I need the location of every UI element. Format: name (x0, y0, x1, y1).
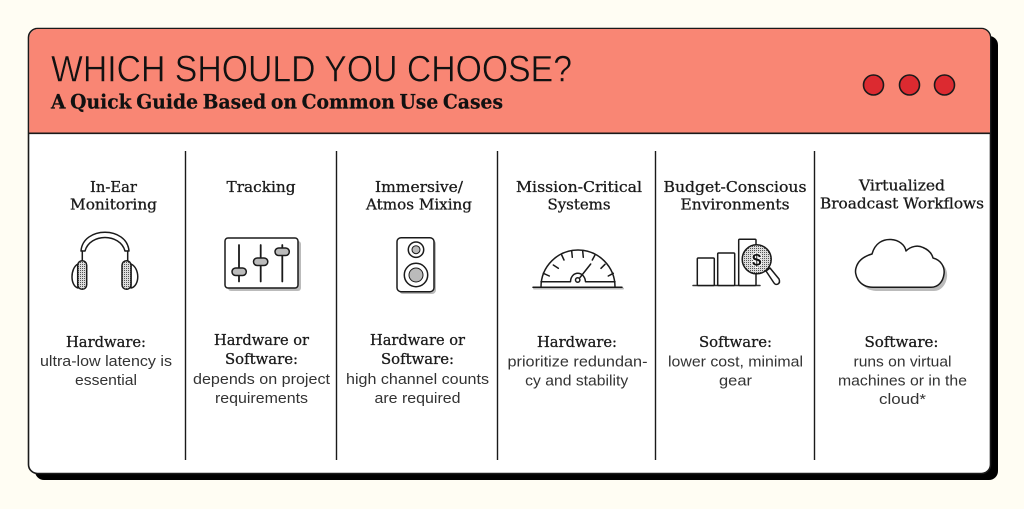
icon: bars with magnifier (693, 239, 779, 286)
icon: speaker (397, 238, 436, 294)
heading: budget-conscious environments (664, 178, 806, 214)
verdict: immersive/atmos mixing: Software: (381, 350, 454, 368)
column: mission-critical systems (508, 178, 648, 390)
verdict: budget-conscious environments: gear (719, 372, 752, 390)
heading: in-ear monitoring: Monitoring (70, 196, 157, 214)
icon: cloud (856, 239, 947, 291)
column: in-ear monitoring (40, 178, 172, 389)
verdict: budget-conscious environments: lower cost, minimal (668, 354, 803, 370)
header band (29, 29, 990, 133)
verdict: immersive/atmos mixing: are required (374, 390, 460, 407)
column: virtualized broadcast workflows (820, 176, 984, 408)
verdict: mission-critical systems (508, 333, 648, 390)
heading: budget-conscious environments: Environments (680, 196, 790, 214)
verdict: tracking: Hardware or (214, 331, 310, 349)
verdict: virtualized broadcast workflows: cloud* (879, 391, 926, 408)
verdict: virtualized broadcast workflows: runs on virtual (854, 354, 952, 370)
column: tracking (193, 178, 331, 407)
verdict: tracking: Software: (225, 350, 298, 368)
verdict: virtualized broadcast workflows: machines or in the (838, 372, 967, 390)
verdict: immersive/atmos mixing (346, 331, 489, 407)
heading: in-ear monitoring (70, 178, 157, 214)
heading: virtualized broadcast workflows: Broadcast Workflows (820, 194, 984, 212)
heading: mission-critical systems (516, 178, 642, 214)
heading: virtualized broadcast workflows (820, 176, 984, 212)
verdict: in-ear monitoring (40, 333, 172, 389)
heading: mission-critical systems: Systems (548, 196, 610, 214)
icon: headphones (72, 232, 138, 289)
verdict: immersive/atmos mixing: high channel counts (346, 371, 489, 388)
verdict: immersive/atmos mixing: Hardware or (370, 331, 466, 349)
verdict: virtualized broadcast workflows: Software: (864, 333, 938, 351)
heading: mission-critical systems: Mission-Critical (516, 178, 642, 196)
window dots (864, 75, 954, 95)
title: WHICH SHOULD YOU CHOOSE? (51, 48, 572, 90)
heading: in-ear monitoring: In-Ear (90, 178, 138, 196)
heading: immersive/atmos mixing: Immersive/ (375, 178, 464, 196)
icon: bars with magnifier: $ (752, 250, 762, 270)
verdict: virtualized broadcast workflows (838, 333, 967, 408)
verdict: tracking (193, 331, 331, 407)
verdict: tracking: depends on project (193, 371, 331, 388)
heading: virtualized broadcast workflows: Virtualized (858, 176, 945, 194)
verdict: in-ear monitoring: essential (75, 372, 137, 389)
verdict: mission-critical systems: prioritize redundan- (508, 354, 648, 370)
verdict: budget-conscious environments (668, 333, 803, 390)
verdict: in-ear monitoring: Hardware: (66, 333, 146, 351)
verdict: mission-critical systems: Hardware: (537, 333, 617, 351)
heading: budget-conscious environments: Budget-Conscious (664, 178, 806, 196)
heading: immersive/atmos mixing (365, 178, 472, 214)
column: budget-conscious environments (664, 178, 806, 390)
subtitle: A Quick Guide Based on Common Use Cases (50, 90, 503, 114)
verdict: in-ear monitoring: ultra-low latency is (40, 353, 172, 370)
verdict: mission-critical systems: cy and stability (525, 372, 629, 390)
column: immersive/atmos mixing (346, 178, 489, 407)
heading: immersive/atmos mixing: Atmos Mixing (365, 196, 472, 214)
icon: gauge (533, 250, 623, 288)
verdict: budget-conscious environments: Software: (699, 333, 772, 351)
icon: mixer sliders (225, 238, 301, 291)
heading: tracking: Tracking (226, 178, 296, 196)
verdict: tracking: requirements (215, 390, 308, 407)
